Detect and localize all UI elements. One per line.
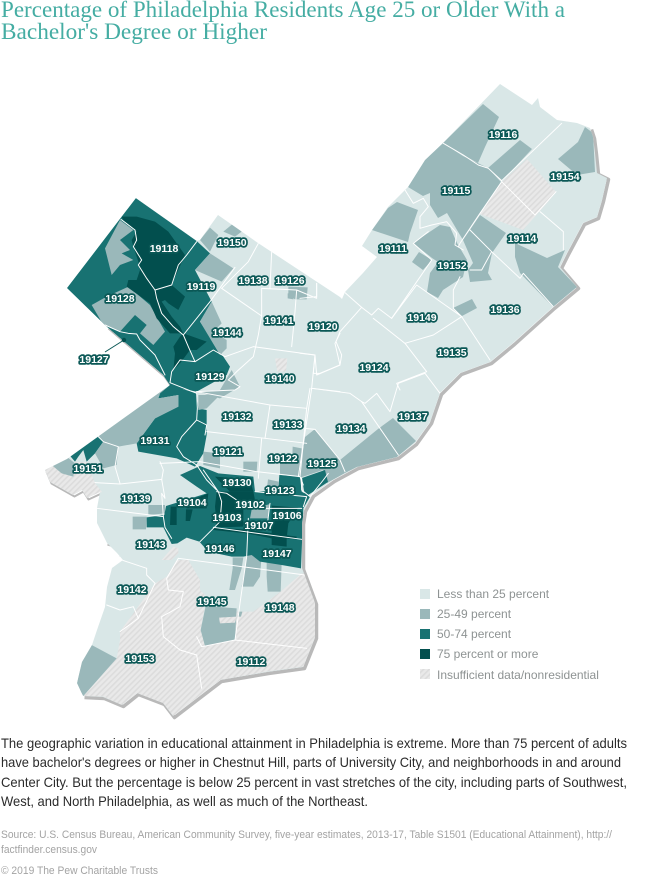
region: river wards: [298, 418, 416, 497]
ZIP code labels: 19133: [273, 419, 303, 431]
body text: [1, 735, 627, 809]
ZIP code labels: 19118: [150, 243, 178, 255]
ZIP code labels: 19111: [379, 243, 407, 255]
ZIP code boundary lines: [95, 123, 563, 688]
ZIP code labels: 19137: [398, 411, 428, 423]
legend: [420, 587, 599, 682]
legend: 50-74 percent: [437, 627, 512, 641]
region: far west hatched: [45, 462, 102, 498]
ZIP code labels: 19150: [217, 237, 247, 249]
ZIP code labels: 19152: [437, 260, 467, 272]
ZIP code labels: 19138: [238, 275, 268, 287]
ZIP code labels: 19122: [268, 453, 298, 465]
ZIP code labels: 19139: [121, 493, 151, 505]
ZIP code labels: 19146: [205, 543, 235, 555]
title: Bachelor's Degree or Higher: [1, 19, 267, 44]
source note: [1, 829, 613, 856]
map: Philadelphia ZIP codes: [45, 84, 608, 718]
ZIP code labels: 19154: [550, 171, 580, 183]
callout line: 19127: [105, 338, 126, 352]
title: [1, 0, 565, 44]
ZIP code labels: 19142: [117, 584, 147, 596]
ZIP code labels: 19114: [508, 233, 536, 245]
source note: Source: U.S. Census Bureau, American Community Survey, five-year estimates, 2013-17, Table S1501 (Educational Attainment), http://: [1, 829, 613, 841]
legend: 75 percent or more: [437, 647, 539, 661]
ZIP code labels: 19120: [308, 321, 338, 333]
ZIP code labels: 19102: [235, 499, 265, 511]
ZIP code labels: 19119: [187, 281, 215, 293]
ZIP code labels: 19129: [195, 371, 225, 383]
ZIP code labels: 19147: [262, 548, 292, 560]
ZIP code labels: 19112: [237, 656, 265, 668]
ZIP code labels: 19106: [272, 510, 302, 522]
ZIP code labels: 19124: [359, 362, 389, 374]
ZIP code labels: 19127: [79, 354, 109, 366]
ZIP code labels: 19141: [264, 315, 294, 327]
ZIP code labels: 19144: [212, 327, 242, 339]
ZIP code labels: 19123: [265, 485, 295, 497]
ZIP code labels: 19121: [213, 446, 243, 458]
ZIP code labels: 19143: [136, 539, 166, 551]
ZIP code labels: 19103: [212, 512, 242, 524]
legend: 25-49 percent: [437, 607, 512, 621]
body text: West, and North Philadelphia, as well as much of the Northeast.: [1, 793, 368, 809]
ZIP code labels: 19145: [197, 596, 227, 608]
ZIP code labels: 19131: [140, 435, 170, 447]
ZIP code labels: 19107: [244, 520, 274, 532]
ZIP code labels: 19115: [442, 185, 470, 197]
ZIP code labels: 19130: [222, 477, 252, 489]
river edge shadow: [46, 130, 608, 718]
city base: less than 25 percent: [45, 84, 607, 716]
region: Northeast: [372, 104, 595, 316]
legend: Less than 25 percent: [437, 587, 550, 601]
ZIP code labels: 19126: [275, 275, 305, 287]
ZIP code labels: 19104: [177, 497, 207, 509]
ZIP code labels: 19135: [437, 347, 467, 359]
source note: factfinder.census.gov: [1, 844, 97, 856]
ZIP code labels: 19148: [265, 602, 295, 614]
legend: Insufficient data/nonresidential: [437, 668, 599, 682]
shaded districts: [45, 104, 595, 716]
ZIP code labels: 19153: [125, 653, 155, 665]
ZIP code labels: 19116: [489, 129, 517, 141]
ZIP code labels: 19136: [490, 304, 520, 316]
ZIP code labels: [73, 129, 580, 668]
ZIP code labels: 19149: [407, 312, 437, 324]
ZIP code labels: 19125: [307, 458, 337, 470]
ZIP code labels: 19151: [73, 463, 103, 475]
ZIP code labels: 19132: [222, 411, 252, 423]
ZIP code labels: 19140: [265, 373, 295, 385]
region: West, Center City and South: [77, 466, 315, 716]
region: Northwest and North: [52, 198, 308, 477]
ZIP code labels: 19134: [336, 423, 366, 435]
ZIP code labels: 19128: [105, 293, 135, 305]
